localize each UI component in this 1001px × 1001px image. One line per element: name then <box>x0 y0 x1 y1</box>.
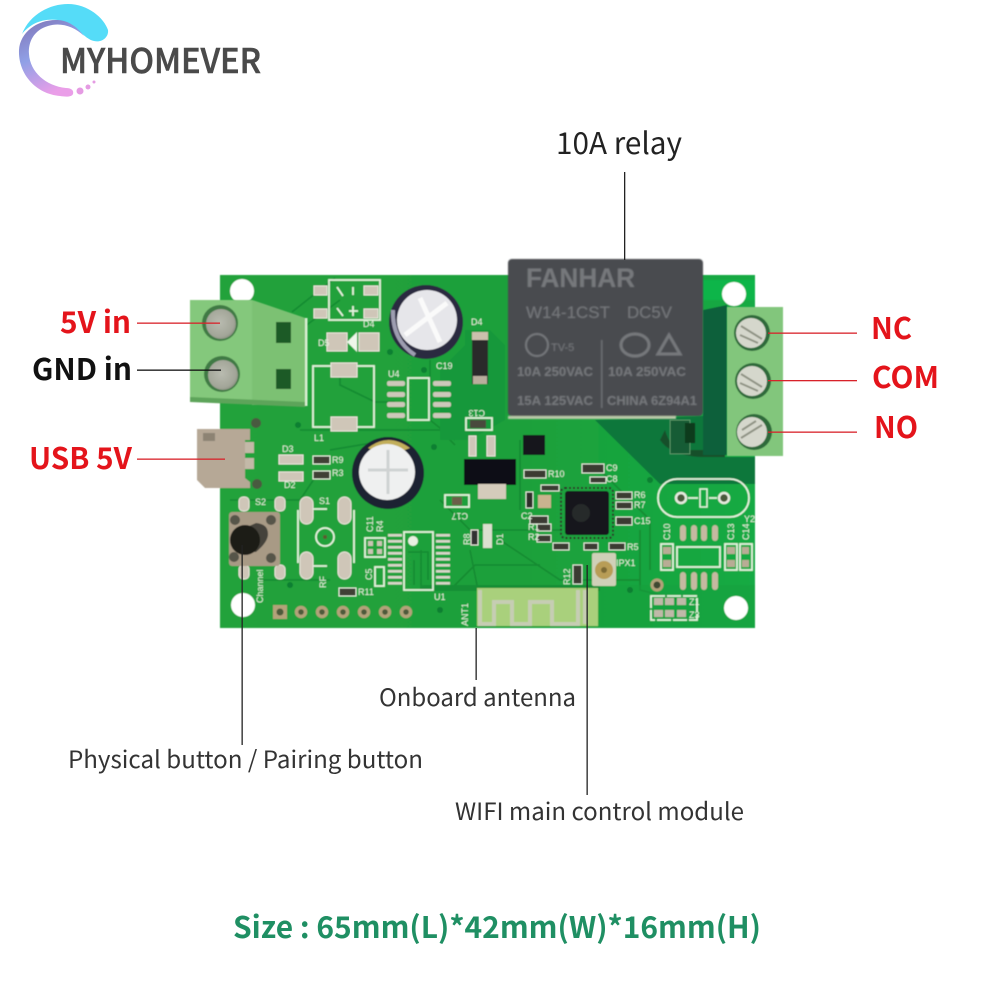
chip U4: C19 <box>436 361 453 371</box>
passive parts around wifi chip: R5 <box>627 542 639 552</box>
circuit board <box>197 275 755 628</box>
callout: onboard antenna: Onboard antenna <box>379 678 576 713</box>
pad group Z1 Z2 Z3: Z3 <box>689 610 700 620</box>
passive parts around wifi chip: C2 <box>521 511 533 521</box>
parts by D1 and C17 <box>445 495 505 548</box>
bridge rectifier and diode footprints <box>314 280 483 352</box>
callout: NC: NC <box>871 304 912 348</box>
regulator <box>464 408 545 499</box>
parts by D1 and C17: D1 <box>495 533 505 545</box>
header pads <box>273 605 410 619</box>
small capacitors C11 R4 C5 R11 <box>339 516 385 597</box>
switch footprint S1: RF <box>318 576 328 588</box>
relay: 10A 250VAC <box>517 364 594 379</box>
logo: MYHOMEVER: MYHOMEVER <box>60 34 261 83</box>
parts by D1 and C17: R8 <box>462 533 472 545</box>
bridge rectifier and diode footprints: D4 <box>363 319 375 329</box>
chip U1 <box>388 532 450 602</box>
callout: WIFI main control module: WIFI main control module <box>455 792 744 827</box>
regulator: C13 <box>468 408 485 418</box>
small capacitors C11 R4 C5 R11: C11 <box>365 516 375 532</box>
small parts near USB: D3 <box>282 444 294 454</box>
board substrate <box>220 275 755 628</box>
switch footprint S1: S1 <box>319 496 330 506</box>
small parts near USB: R3 <box>332 468 344 478</box>
left screw terminal <box>190 300 308 407</box>
callout: 5V in: 5V in <box>60 298 131 342</box>
relay: DC5V <box>627 303 673 322</box>
switch footprint S1 <box>298 496 354 588</box>
crystal Y2 <box>658 479 755 524</box>
inductor L1 <box>313 363 374 443</box>
chip U4 <box>387 361 453 420</box>
relay: FANHAR <box>526 263 635 293</box>
callout: COM: COM <box>872 353 939 397</box>
copper traces <box>230 278 755 628</box>
inductor L1: L1 <box>314 433 324 443</box>
relay <box>508 259 703 419</box>
logo: MYHOMEVER <box>19 4 261 97</box>
passive parts around wifi chip <box>521 463 651 585</box>
passive parts around wifi chip: IPX1 <box>616 558 636 568</box>
chip U4: U4 <box>388 369 400 379</box>
crystal Y2: Y2 <box>744 514 755 524</box>
passive parts around wifi chip: R1 <box>528 522 540 532</box>
bridge rectifier and diode footprints: D4 <box>471 317 483 327</box>
tact button S2: Channel <box>255 569 265 603</box>
pad group Z1 Z2 Z3 <box>651 596 700 620</box>
small parts near USB <box>279 444 344 490</box>
chip U1: U1 <box>434 592 446 602</box>
callout: USB 5V: USB 5V <box>29 434 132 478</box>
passive parts around wifi chip: C8 <box>606 474 618 484</box>
relay: 15A 125VAC <box>517 393 594 408</box>
small capacitors C11 R4 C5 R11: R11 <box>358 587 374 597</box>
mounting holes <box>230 279 748 620</box>
chip U3 with capacitors: C13 <box>726 523 736 540</box>
relay: CHINA 6Z94A1 <box>607 393 697 408</box>
passive parts around wifi chip: R10 <box>548 469 565 479</box>
PCB antenna <box>460 588 598 626</box>
passive parts around wifi chip: R6 <box>634 490 646 500</box>
callout: physical button: Physical button / Pairing button <box>68 740 423 775</box>
relay: 10A 250VAC <box>608 364 687 379</box>
small parts near USB: R9 <box>332 455 344 465</box>
passive parts around wifi chip: R2 <box>528 532 540 542</box>
capacitor C19 <box>389 285 463 359</box>
parts by D1 and C17: C17 <box>451 511 468 521</box>
chip U3 with capacitors: C10 <box>662 523 672 540</box>
IPX antenna socket <box>592 553 616 586</box>
passive parts around wifi chip: R7 <box>634 500 646 510</box>
small capacitors C11 R4 C5 R11: R4 <box>375 520 385 532</box>
diode D1 <box>472 332 488 384</box>
small capacitors C11 R4 C5 R11: C5 <box>364 568 374 580</box>
relay: W14-1CST <box>526 303 610 322</box>
callout: GND in: GND in <box>32 345 132 389</box>
callout: 10A relay: 10A relay <box>556 119 682 163</box>
wifi chip U2 <box>561 488 613 538</box>
tact button S2: S2 <box>255 497 266 507</box>
passive parts around wifi chip: C15 <box>634 516 651 526</box>
pad group Z1 Z2 Z3: Z1 <box>689 597 700 607</box>
passive parts around wifi chip: R12 <box>562 568 572 585</box>
chip U3 with capacitors: C14 <box>741 523 751 540</box>
tact button S2 <box>229 497 285 603</box>
relay: TV-5 <box>551 342 574 354</box>
right screw terminal <box>670 307 783 456</box>
bridge rectifier and diode footprints: D5 <box>318 338 330 348</box>
size caption: Size : 65mm(L)*42mm(W)*16mm(H) <box>233 903 761 947</box>
micro USB connector <box>197 418 262 489</box>
chip U3 with capacitors <box>652 523 752 590</box>
capacitor C18 <box>352 437 424 509</box>
passive parts around wifi chip: C9 <box>606 463 618 473</box>
PCB antenna: ANT1 <box>460 603 470 626</box>
small parts near USB: D2 <box>284 480 296 490</box>
callout: NO: NO <box>874 403 918 447</box>
